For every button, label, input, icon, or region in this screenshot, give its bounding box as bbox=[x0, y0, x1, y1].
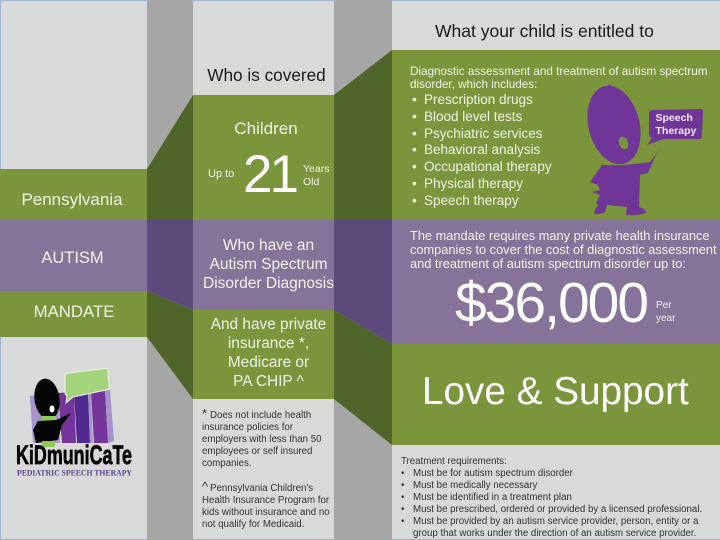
left label: MANDATE: MANDATE bbox=[34, 302, 114, 321]
panel: diagnosis: Who have an bbox=[223, 237, 314, 254]
footnote: insurance exclusion bbox=[202, 406, 322, 469]
list: covered services bbox=[412, 92, 552, 208]
panel: diagnosis bbox=[203, 237, 334, 292]
footnote: insurance exclusion: companies. bbox=[202, 458, 252, 469]
footnotes bbox=[202, 406, 330, 530]
footnote: insurance exclusion: Does not include health bbox=[210, 410, 311, 420]
panel: entitlements text: Diagnostic assessment and treatment of autism spectrum bbox=[410, 64, 708, 78]
text: treatment requirements: Must be for autism spectrum disorder bbox=[413, 468, 573, 479]
list: covered services: Prescription drugs bbox=[424, 92, 533, 107]
heading: Who is covered: Who is covered bbox=[207, 65, 326, 85]
list: covered services: Blood level tests bbox=[424, 109, 522, 124]
list: covered services: • bbox=[412, 126, 417, 141]
text: Years Old: Years bbox=[303, 163, 329, 175]
text: treatment requirements: Must be prescribed, ordered or provided by a licensed professional. bbox=[413, 504, 702, 515]
text: Years Old bbox=[303, 163, 330, 188]
text: treatment requirements: • bbox=[401, 480, 404, 491]
footnote: PA CHIP: kids without insurance and no bbox=[202, 507, 330, 518]
list: covered services: • bbox=[412, 159, 417, 174]
text: treatment requirements: Must be provided by an autism service provider, person, entity or a bbox=[413, 516, 698, 527]
list: covered services: • bbox=[412, 109, 417, 124]
panel: insurance bbox=[210, 316, 326, 390]
text: Per year: year bbox=[656, 312, 675, 324]
panel: diagnosis: Disorder Diagnosis bbox=[203, 275, 334, 292]
text: treatment requirements: • bbox=[401, 468, 404, 479]
footnote: insurance exclusion: employees or self insured bbox=[202, 446, 312, 457]
panel: mandate cost: The mandate requires many private health insurance bbox=[410, 228, 709, 243]
text: treatment requirements: • bbox=[401, 516, 404, 527]
left label: AUTISM: AUTISM bbox=[41, 249, 104, 267]
bubble text: Speech bbox=[656, 112, 693, 124]
text: Up to: Up to bbox=[208, 168, 234, 180]
logo: Kidmunicate bbox=[16, 368, 132, 478]
number: 21: 21 bbox=[243, 145, 296, 204]
list: covered services: Psychiatric services bbox=[424, 126, 543, 141]
panel: insurance: PA CHIP ^ bbox=[233, 373, 304, 390]
number: $36,000: $36,000 bbox=[455, 271, 647, 335]
text: Years Old: Old bbox=[303, 176, 319, 188]
panel: entitlements text bbox=[410, 64, 708, 91]
text: treatment requirements: group that works under the direction of an autism service provider. bbox=[413, 528, 696, 539]
panel: mandate cost: companies to cover the cost of diagnostic assessment bbox=[410, 242, 717, 257]
list: covered services: • bbox=[412, 176, 417, 191]
footnote: PA CHIP: Health Insurance Program for bbox=[202, 495, 329, 506]
panel: entitlements text: disorder, which includes: bbox=[410, 78, 537, 91]
text: treatment requirements: Must be identified in a treatment plan bbox=[413, 492, 572, 503]
panel: mandate cost: and treatment of autism spectrum disorder up to: bbox=[410, 256, 686, 271]
logo tagline: PEDIATRIC SPEECH THERAPY bbox=[17, 468, 132, 478]
panel: children age bbox=[208, 119, 330, 204]
icon: purple character with speech bubble bbox=[587, 84, 703, 216]
bubble text: Therapy bbox=[656, 125, 697, 137]
text: Children: Children bbox=[234, 119, 298, 138]
left label: Pennsylvania: Pennsylvania bbox=[21, 190, 123, 209]
text: Per year bbox=[656, 300, 676, 324]
panel: diagnosis: Autism Spectrum bbox=[209, 256, 328, 273]
list: covered services: Speech therapy bbox=[424, 193, 519, 208]
panel: insurance: And have private bbox=[211, 316, 326, 333]
list: covered services: Physical therapy bbox=[424, 176, 523, 191]
heading: Love & Support: Love & Support bbox=[422, 370, 689, 413]
footnote: PA CHIP: Pennsylvania Children's bbox=[210, 483, 313, 494]
footnote: PA CHIP bbox=[202, 479, 330, 530]
panel: mandate cost bbox=[410, 228, 717, 271]
text: treatment requirements: • bbox=[401, 492, 404, 503]
list: covered services: • bbox=[412, 142, 417, 157]
text: treatment requirements: Must be medically necessary bbox=[413, 480, 537, 491]
footnote: PA CHIP: ^ bbox=[202, 479, 208, 494]
list: covered services: • bbox=[412, 193, 417, 208]
panel: insurance: Medicare or bbox=[228, 354, 309, 371]
list: covered services: Behavioral analysis bbox=[424, 142, 540, 157]
text: treatment requirements bbox=[401, 456, 702, 539]
list: covered services: • bbox=[412, 92, 417, 107]
heading: What your child is entitled to: What your child is entitled to bbox=[435, 21, 654, 41]
bubble text bbox=[656, 112, 697, 137]
footnote: PA CHIP: not qualify for Medicaid. bbox=[202, 519, 304, 530]
list: covered services: Occupational therapy bbox=[424, 159, 552, 174]
text: Per year: Per bbox=[656, 300, 672, 311]
footnote: insurance exclusion: employers with less than 50 bbox=[202, 434, 322, 445]
footnote: insurance exclusion: insurance policies for bbox=[202, 422, 293, 433]
footnote: insurance exclusion: * bbox=[202, 406, 207, 420]
text: treatment requirements: Treatment requirements: bbox=[401, 456, 507, 467]
text: treatment requirements: • bbox=[401, 504, 404, 515]
panel: insurance: insurance *, bbox=[228, 335, 309, 352]
